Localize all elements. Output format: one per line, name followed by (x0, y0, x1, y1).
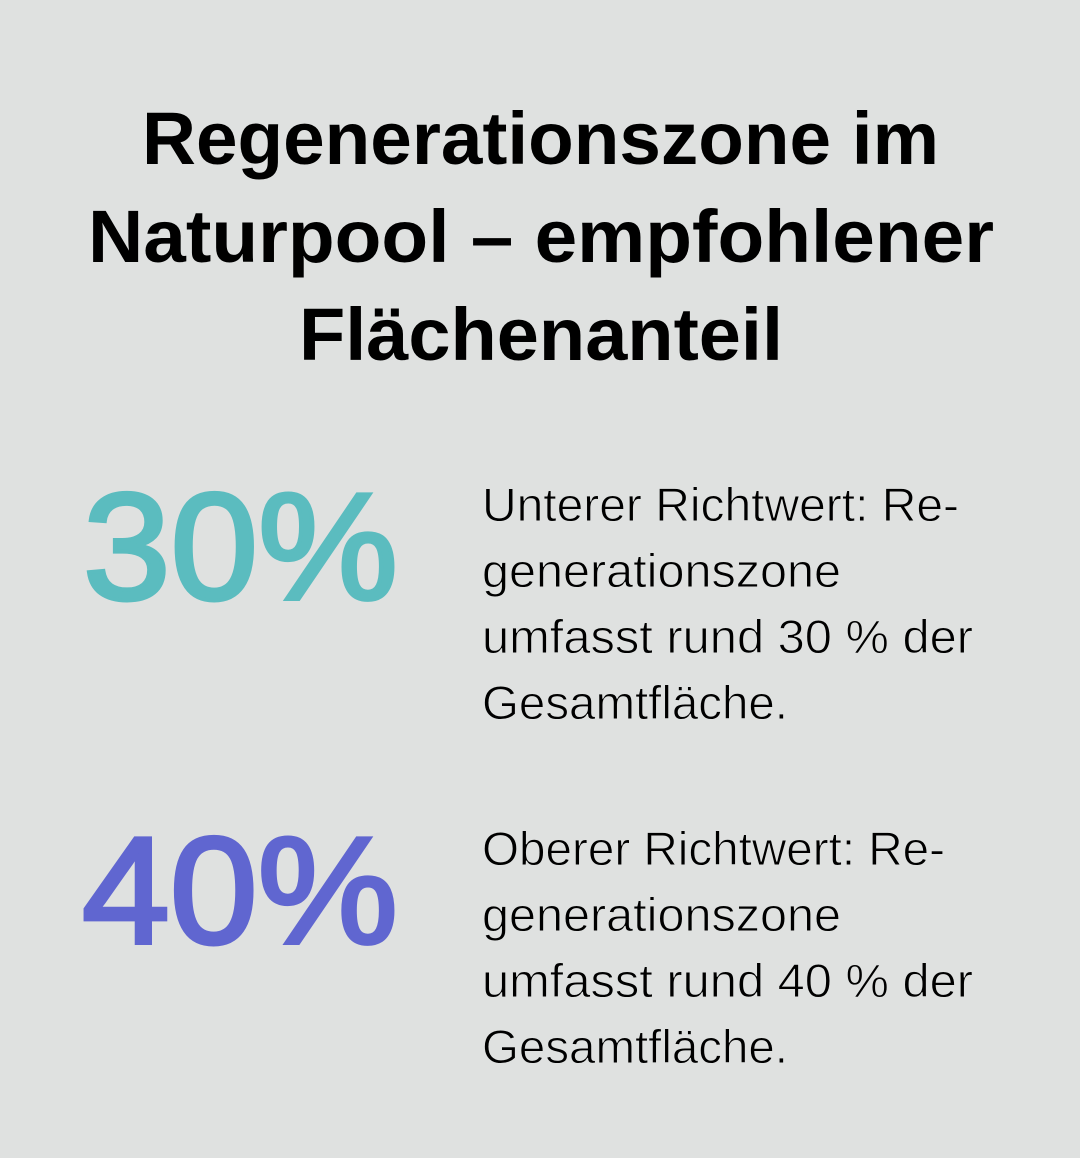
title (88, 97, 994, 376)
text block: upper guideline (482, 823, 973, 1074)
text block: upper guideline: Gesamtfläche. (482, 1021, 788, 1074)
text block: upper guideline: umfasst rund 40 % der (482, 955, 973, 1008)
title: Regenerationszone im (142, 97, 939, 180)
text block: lower guideline: Gesamtfläche. (482, 677, 788, 730)
text block: upper guideline: generationszone (482, 889, 841, 942)
stat: 40%: 40% (82, 806, 398, 976)
text block: lower guideline (482, 479, 973, 730)
text block: lower guideline: generationszone (482, 545, 841, 598)
title: Naturpool – empfohlener (88, 195, 994, 278)
text block: lower guideline: umfasst rund 30 % der (482, 611, 973, 664)
text block: upper guideline: Oberer Richtwert: Re- (482, 823, 945, 876)
title: Flächenanteil (299, 293, 783, 376)
stat: 30%: 30% (83, 462, 398, 632)
text block: lower guideline: Unterer Richtwert: Re- (482, 479, 959, 532)
